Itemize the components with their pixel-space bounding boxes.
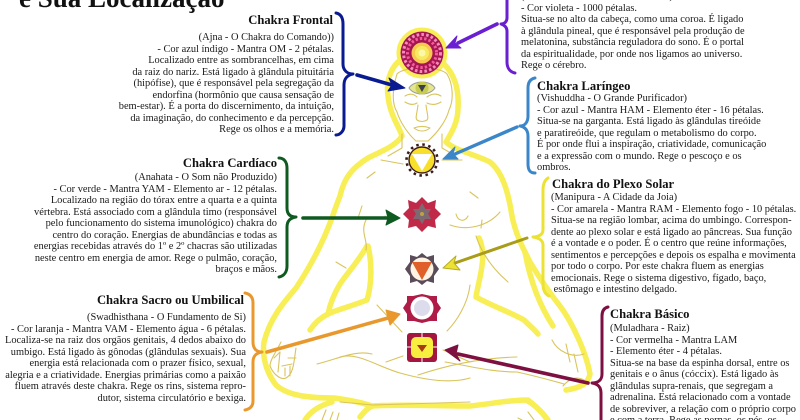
text: Chakra Coronário (top clipped): Rege o cérebro. [521,60,586,71]
text: Chakra Cardíaco: - Cor verde - Mantra YAM - Elemento ar - 12 pétalas. [53,184,277,195]
heading: Chakra do Plexo Solar: Chakra do Plexo Solar [552,177,674,191]
text: Chakra Laríngeo: e paratireóide, que regulam o metabolismo do corpo. [537,128,757,139]
text: Chakra Frontal: da raiz do nariz. Está ligado à glândula pituitária [132,67,334,78]
text: Chakra Sacro ou Umbilical: - Cor laranja - Mantra VAM - Elemento água - 6 pétalas. [11,324,246,335]
bracket and arrow: crown [446,0,515,73]
body outline: yellow aura [264,30,590,420]
heading: Chakra Sacro ou Umbilical: Chakra Sacro ou Umbilical [97,293,244,307]
bracket and arrow: sacral [245,293,400,410]
text: Chakra Sacro ou Umbilical: umbigo. Está ligado às gônodas (glândulas sexuais). Sua [11,347,246,358]
text: Chakra Básico: de sobreviver, a relação com o próprio corpo [610,404,796,415]
text: Chakra Frontal: endorfina (hormônio que causa sensação de [153,90,334,101]
bracket and arrow: heart [279,158,400,277]
text: Chakra Cardíaco: braços e mãos. [216,264,277,275]
text: Chakra Cardíaco: Localizado na região do tórax entre a quarta e a quinta [51,195,277,206]
chakra: solar plexus [405,253,439,285]
text: Chakra do Plexo Solar: emocionais. Rege o sistema digestivo, fígado, baço, [551,273,766,284]
text: Chakra do Plexo Solar: Situa-se na região lombar, acima do umbingo. Correspon- [551,215,792,226]
bracket and arrow: throat [443,78,535,173]
text: Chakra Sacro ou Umbilical: fluem através deste chakra. Rege os rins, sistema repro- [15,381,246,392]
text: Chakra Laríngeo: (Vishuddha - O Grande Purificador) [537,93,687,104]
text: Chakra do Plexo Solar: é a vontade e o poder. É o centro que reúne informações, [551,238,787,249]
text: Chakra do Plexo Solar: (Manipura - A Cidade da Joia) [551,192,677,203]
text: Chakra Sacro ou Umbilical: alegria e a criatividade. Energias primárias como a paixão [5,370,246,381]
text: Chakra do Plexo Solar: estômago e intestino delgado. [554,284,677,295]
text: Chakra Laríngeo: - Cor azul - Mantra HAM - Elemento éter - 16 pétalas. [537,105,764,116]
body outline: thin ochre contour [270,68,584,420]
text: Chakra Cardíaco: vértebra. Está associado com a glândula timo (responsável [34,207,277,218]
chakra: crown [400,32,444,74]
text: Chakra Coronário (top clipped): à glândula pineal, que é responsável pela produção de [521,26,745,37]
text: Chakra Básico: - Cor vermelha - Mantra LAM [610,335,737,346]
text: Chakra Cardíaco [34,172,277,275]
text: Chakra do Plexo Solar: - Cor amarela - Mantra RAM - Elemento fogo - 10 pétalas. [551,204,796,215]
chakra: sacral [403,294,441,323]
text: Chakra Laríngeo: É por onde flui a inspiração, criatividade, comunicação [537,139,766,150]
text: Chakra Sacro ou Umbilical: (Swadhisthana - O Fundamento de Si) [87,312,246,323]
text: Chakra Básico: glândulas supra-renais, que segregam a [610,381,773,392]
text: Chakra Cardíaco: neste centro em energia de amor. Rege o pulmão, coração, [35,253,277,264]
text: Chakra Laríngeo [537,93,766,173]
text: Chakra Coronário (top clipped) [521,0,745,71]
text: Chakra Frontal: da imaginação, do conhecimento e da percepção. [130,113,334,124]
text: Chakra Laríngeo: e a expressão com o mundo. Rege o pescoço e os [537,151,742,162]
text: Chakra Coronário (top clipped): - Cor violeta - 1000 pétalas. [521,3,637,14]
text: Chakra Frontal: bem-estar). É a porta do discernimento, da intuição, [119,101,334,112]
text: Chakra Frontal: (Ajna - O Chakra do Comando)) [199,32,334,43]
text: Chakra Frontal: Localizado entre as sombrancelhas, em cima [148,55,334,66]
text: Chakra do Plexo Solar: dente ao plexo solar e está ligado ao pâncreas. Sua função [551,227,792,238]
text: Chakra Frontal: Rege os olhos e a memória. [219,124,334,135]
text: Chakra Básico: adrenalina. Está relacionado com a vontade [610,392,791,403]
bracket and arrow: third eye [336,13,405,135]
text: Chakra Básico: Situa-se na base da espinha dorsal, entre os [610,358,789,369]
text: Chakra Frontal: (hipófise), que é responsável pela segregação da [133,78,334,89]
text: Chakra Sacro ou Umbilical: Localiza-se na raiz dos orgãos genitais, 4 dedos abaixo do [5,335,246,346]
text: Chakra Sacro ou Umbilical: energia está relacionada com o prazer físico, sexual, [30,358,246,369]
heading: Chakra Frontal: Chakra Frontal [248,13,333,27]
text: Chakra Coronário (top clipped): da espiritualidade, por onde nos ligamos ao universo. [521,49,742,60]
text: Chakra Laríngeo: ombros. [537,162,571,173]
text: Chakra Laríngeo: Situa-se na garganta. Está ligado às glândulas tireóide [537,116,761,127]
text: Chakra Cardíaco: energias recebidas através do 1º e 2º chacras são utilizadas [34,241,277,252]
text: Chakra do Plexo Solar: sentimentos e percepções e depois os espalha e movimenta [551,250,796,261]
heading: Chakra Básico: Chakra Básico [610,307,689,321]
text: Chakra Frontal: - Cor azul índigo - Mantra OM - 2 pétalas. [157,44,334,55]
text: Chakra Básico: genitais e o ânus (cóccix). Está ligado às [610,369,779,380]
chakra: heart [403,197,441,232]
text: Chakra Básico [610,323,796,420]
chakra: third eye [409,82,435,94]
text: Chakra Cardíaco: (Anahata - O Som não Produzido) [135,172,277,183]
text: Chakra Frontal [118,32,334,135]
text: Chakra Sacro ou Umbilical [5,312,246,404]
text: Chakra do Plexo Solar: por todo o corpo. Por este chakra fluem as energias [551,261,764,272]
bracket and arrow: solar plexus [443,178,549,296]
head and face contour [393,68,452,141]
text: Chakra Coronário (top clipped): Situa-se no alto da cabeça, como uma coroa. É ligado [521,14,743,25]
text: Chakra Sacro ou Umbilical: dutor, sistema circulatório e bexiga. [98,393,246,404]
text: Chakra Básico: - Elemento éter - 4 pétalas. [610,346,722,357]
heading: Chakra Laríngeo: Chakra Laríngeo [537,79,630,93]
chakra: throat [406,144,438,176]
text: Chakra do Plexo Solar [551,192,796,295]
text: Chakra Coronário (top clipped): melatonina, substância reguladora do sono. É o portal [521,37,744,48]
text: Chakra Cardíaco: centro do coração. Energias de abundâncias e todas as [52,230,277,241]
chakra: root [407,333,437,362]
heading: Chakra Cardíaco: Chakra Cardíaco [183,156,277,170]
bracket and arrow: root [445,307,608,420]
text: Chakra Básico: (Muladhara - Raiz) [610,323,690,334]
text: Chakra Cardíaco: pelo funcionamento do sistema imunológico) chakra do [46,218,277,229]
